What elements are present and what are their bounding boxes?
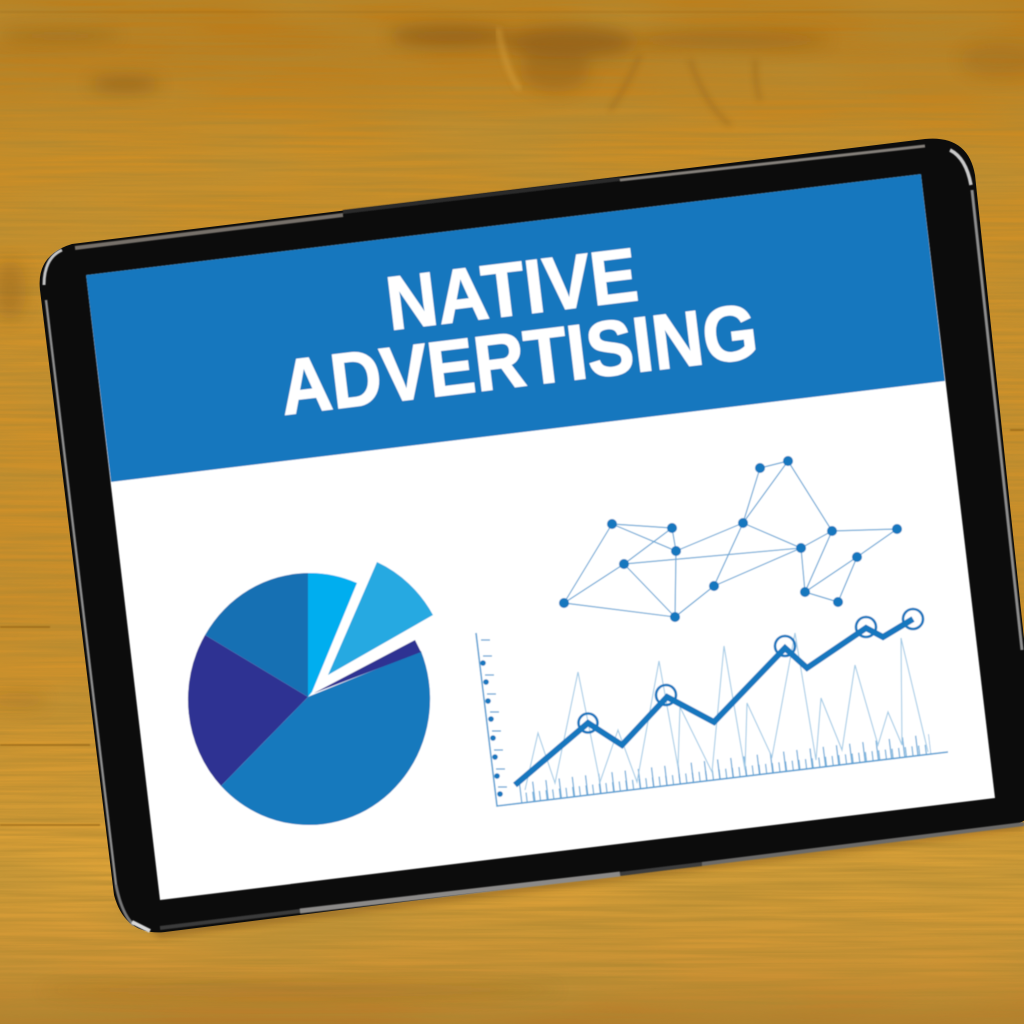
axis ticks [481,640,930,798]
screen [86,174,995,900]
thin peaks [525,633,928,790]
trend markers [578,609,923,732]
pie chart [188,562,433,825]
tablet shadow [115,815,1024,938]
title: NATIVE [382,232,642,347]
pie slice: top left blue [205,573,309,697]
header band [86,174,945,482]
tablet [40,139,1024,938]
pie slice: large blue [221,651,430,825]
network diagram [559,456,902,622]
y axis dots [480,660,503,797]
tablet metal rim [44,146,1024,931]
tablet body [40,139,1024,932]
chart axes [476,633,948,806]
pie slice: navy sliver [314,640,421,693]
pie slice: exploded [328,562,433,675]
pie slice: cyan [308,573,357,697]
line chart [476,609,948,806]
pie slice: navy [188,635,308,786]
title: ADVERTISING [275,287,762,432]
trend line [515,619,913,785]
